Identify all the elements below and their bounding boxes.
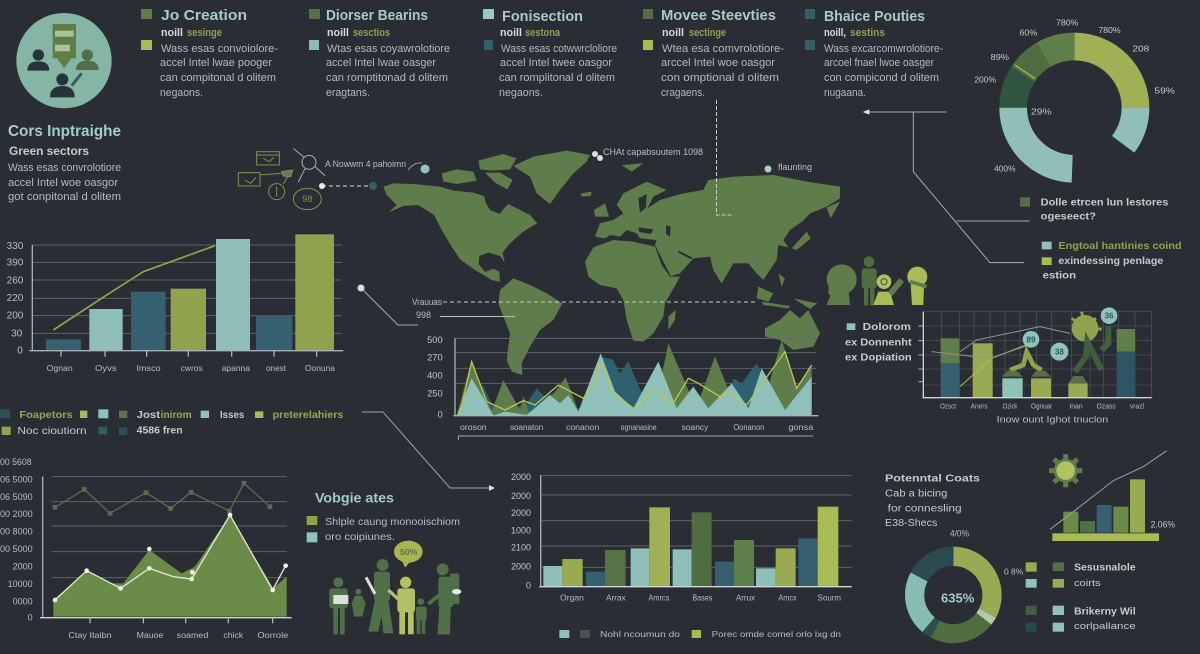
Svalbard [622,163,643,172]
line and area chart: bottom left: 06 5090 [0,492,33,502]
text block: Cors Inptraighe: accel Intel woe oasgor [8,177,118,189]
column: Fonisection [483,8,617,99]
column: Diorser Bearins: can romptitonad d olitem [326,72,448,84]
line and area chart: bottom left: Ctay Itaibn [68,630,112,640]
column: Bhaice Pouties: Bhaice Pouties [824,8,925,25]
area chart: centre: oroson [460,423,487,432]
Australia [765,310,820,350]
legend: bottom right [1026,562,1136,632]
donut chart: top right: 780% [1098,25,1121,35]
bar chart: bottom centre: Bases [692,593,712,603]
column: Fonisection: Fonisection [502,8,583,25]
area chart: centre: 500 [427,335,443,345]
bar chart: left: lmsco [137,363,161,373]
arrow: legend to bottom chart [362,412,495,491]
bar chart: bottom centre: Porec omde comel orlo lxg dn [712,629,841,639]
column: Movee Steevties [643,7,784,99]
Kamchatka [827,202,840,218]
bar chart: left [7,234,343,373]
column: Bhaice Pouties: sestins [850,27,885,39]
area chart: centre: 250 [427,389,443,399]
legend: left: Isses [220,410,245,421]
column: Diorser Bearins: noill [327,27,349,39]
text block: Potential Costs [885,473,980,539]
icon: gear and mini bar chart [1049,451,1175,541]
line and area chart: bottom left: 10000 [8,579,33,589]
bar chart with figures: right: Aners [971,401,988,410]
legend: left [0,409,344,437]
donut chart: top right: 60% [1019,28,1038,38]
legend: top right: Dolle etrcen lun lestores [1041,198,1169,209]
icon: people around document badge [16,13,112,108]
column: Movee Steevties: con omptional d olitem [661,72,779,84]
column: Fonisection: noill [500,27,522,39]
bar chart with figures: right: Ognuar [1031,401,1053,410]
donut chart: top right [974,17,1175,183]
column: Fonisection: sestona [525,27,561,39]
legend: Dolorom [845,322,912,363]
column: Jo Creation: accel Intel lwae pooger [160,57,272,69]
column: Bhaice Pouties: nugaana. [824,87,866,99]
bar chart: left: 390 [7,258,24,269]
legend: bottom right: Brikerny Wil [1074,606,1136,617]
bar chart: bottom centre: 2000 [511,561,531,571]
area chart: centre: soancy [682,423,708,432]
bar chart: left: 200 [7,310,24,321]
text block: Cors Inptraighe: Wass esas convrolotiore [8,162,121,174]
column: Diorser Bearins: sesctios [353,27,390,39]
text block: Cors Inptraighe [8,123,121,203]
legend: left: 4586 fren [137,425,183,436]
line and area chart: bottom left: 00 5608 [0,457,32,467]
legend: left: preterelahiers [273,410,344,421]
bar chart: bottom centre: 1000 [511,525,531,535]
legend: bottom right: corlpallance [1074,621,1136,631]
bar chart with figures: right: 89 [1027,335,1036,344]
bar chart: bottom centre: Arrax [606,593,626,603]
line and area chart: bottom left: Oorrole [257,630,289,640]
line and area chart: bottom left: 0000 [13,597,33,607]
area chart: centre: ognanasine [621,423,657,432]
bar chart: bottom centre: Arrux [736,593,756,603]
text block: Vobgie ates [307,490,460,543]
line and area chart: bottom left [0,457,292,640]
bar chart: bottom centre: 0 [526,580,531,590]
bar chart with figures: right: Inan [1069,401,1083,410]
bar chart: left: 260 [7,275,24,286]
line and area chart: bottom left: 00 5000 [0,544,33,554]
donut chart: top right: 29% [1031,107,1052,117]
icon: people with tools [827,256,927,305]
column: Fonisection: can romplitonal d olitem [499,72,615,84]
line and area chart: bottom left: 06 5000 [0,474,33,484]
bar chart: bottom centre: 2000 [511,508,531,518]
text block: Potential Costs: for connesling [888,504,962,515]
icon: gear and mini bar chart: 2.06% [1151,519,1175,529]
column: Diorser Bearins [309,7,450,99]
bar chart with figures: right: Inow ount Ighot tnuclon [997,415,1108,425]
column: Movee Steevties: sectinge [689,27,726,39]
text block: Potential Costs: 4/0% [950,529,969,539]
column: Fonisection: Wass esas cotwwrcloliore [501,43,617,55]
bar chart: bottom centre: Organ [560,593,584,603]
text block: Potential Costs: E38-Shecs [885,518,937,529]
bar chart: left: 30 [11,329,23,340]
bar chart: left: Ognan [47,363,73,373]
legend: top right: exindessing penlage [1058,256,1164,267]
column: Diorser Bearins: accel Intel lwae oasger [326,57,436,69]
bar chart with figures: right [918,307,1152,425]
Iceland [581,192,592,197]
line and area chart: bottom left: Mauoe [137,630,164,640]
legend: Dolorom: ex Dopiation [845,352,912,363]
Greenland [513,151,590,204]
donut chart: top right: 89% [991,52,1009,62]
legend: top right [1020,197,1182,282]
line and area chart: bottom left: chick [223,630,244,640]
area chart: centre: gonsa [788,423,814,432]
bar chart: left: cwros [181,363,203,373]
bar chart: left: 0 [17,345,23,356]
Indonesia [757,287,773,302]
donut chart: top right: 780% [1056,17,1079,27]
column: Jo Creation: Wass esas convoiolore- [161,43,278,55]
text block: Cors Inptraighe: Cors Inptraighe [8,123,121,140]
text block: Potential Costs: Cab a bicing [885,489,947,500]
column: Bhaice Pouties: con compicond d olitem [824,72,939,84]
dashed connector [319,182,377,190]
column: Movee Steevties: noill [662,27,684,39]
bar chart: bottom centre: Sourm [818,593,841,603]
bar chart with figures: right: Ozsct [940,401,956,410]
column: Jo Creation: Jo Creation [161,7,247,24]
column: Jo Creation [141,7,278,99]
bar chart: bottom centre: 2100 [511,543,531,553]
column: Jo Creation: sesinge [187,27,222,39]
column: Fonisection: negaons. [499,87,543,99]
donut chart: top right: 208 [1132,43,1150,53]
inland seas [638,227,653,234]
bar chart: bottom centre [511,472,852,639]
South America [498,278,562,375]
Madagascar [668,310,676,330]
bar chart with figures: right: vrazl [1130,401,1144,410]
column: Jo Creation: noill [161,27,183,39]
map callouts: CHAt capabsuutem 1098 [603,147,703,157]
text block: Vobgie ates: Shlple caung monooischiom [325,517,460,528]
legend: left: Noc cioutiorn [17,426,87,437]
text block: Potential Costs: Potenntal Coats [885,473,980,484]
line and area chart: bottom left: 00 2000 [0,509,33,519]
column: Bhaice Pouties [805,8,943,99]
legend: Dolorom: ex Donnenht [845,337,912,348]
column: Movee Steevties: Wtea esa comvrolotiore- [662,43,784,55]
donut chart: top right: 400% [994,163,1016,173]
line and area chart: bottom left: 2000 [13,561,33,571]
bar chart: left: onest [266,363,287,373]
bar chart: left: 220 [7,293,24,304]
legend: bottom right: Sesusnalole [1074,563,1136,574]
column: Movee Steevties: cragaens. [661,87,705,99]
donut chart: top right: 200% [974,74,996,84]
bar chart with figures: right: Ozass [1097,401,1116,410]
column: Jo Creation: negaons. [160,87,203,99]
donut chart: top right: 59% [1154,85,1175,95]
column: Movee Steevties: Movee Steevties [661,7,776,24]
area chart: centre: 0 [437,409,443,419]
bar chart: bottom centre: Nohl ncoumun do [600,629,680,639]
Eurasia [595,175,840,283]
legend: left: Foapetors [19,410,73,421]
column: Movee Steevties: arccel Intel woe oasgor [661,57,775,69]
column: Bhaice Pouties: noill, [824,27,846,39]
bar chart with figures: right: 36 [1105,312,1114,321]
Japan [792,232,811,250]
text block: Cors Inptraighe: got conpitonal d olitem [8,191,121,203]
donut chart: bottom right: 0 8% [1004,566,1024,576]
column: Bhaice Pouties: Wass excarcomwrolotiore- [824,43,943,55]
bar chart: left: Oyvs [95,363,117,373]
UK [594,203,609,217]
donut chart: bottom right [905,547,1024,643]
world map [383,151,840,375]
column: Bhaice Pouties: arcoel fnael lwoe oasger [824,57,934,69]
legend: top right: estion [1043,271,1076,282]
bar chart: left: Oonuna [305,363,335,373]
icon: group of people with speech bubble: 50% [400,547,418,557]
North America [383,183,537,282]
legend: left: Jost [137,410,161,421]
text block: Vobgie ates: oro coipiunes. [325,532,395,543]
map callouts: flaunting [778,162,812,172]
text block: Vobgie ates: Vobgie ates [315,490,394,506]
area chart: centre [427,335,818,440]
legend: top right: ogeseect? [1041,211,1096,222]
line and area chart: bottom left: soamed [177,630,209,640]
arrows: right connector lines [863,109,1029,263]
bar chart: left: 330 [7,241,24,252]
area chart: centre: 400 [427,371,443,381]
legend: Dolorom: Dolorom [863,322,911,333]
bar chart with figures: right: Ozick [1003,401,1018,410]
column: Diorser Bearins: eragtans. [326,87,370,99]
line and area chart: bottom left: 0 [28,613,33,623]
map callouts [325,100,812,325]
Arctic islands [442,169,477,184]
column: Fonisection: accel Intel twee oasgor [500,57,612,69]
legend: bottom right: coirts [1074,578,1101,588]
bar chart: left: apanna [222,363,250,373]
bar chart: bottom centre: 2000 [511,472,531,482]
donut chart: bottom right: 635% [941,590,974,605]
legend: top right: Engtoal hantinies coind [1058,241,1182,252]
bar chart with figures: right: 38 [1055,348,1064,357]
map callouts: 998 [416,310,431,320]
text block: Cors Inptraighe: Green sectors [9,144,89,158]
line and area chart: bottom left: 00 8000 [0,526,33,536]
icon: group of people with speech bubble [329,541,461,634]
column: Diorser Bearins: Wtas esas coyawrolotiore [327,43,450,55]
area chart: centre: conanon [566,423,599,432]
bar chart: bottom centre: 2000 [511,491,531,501]
Africa [585,240,680,342]
legend: left: inirom [161,410,192,421]
column: Diorser Bearins: Diorser Bearins [326,7,428,24]
area chart: centre: Oonanon [733,423,764,432]
bar chart: bottom centre: Amcx [778,593,797,603]
small analysis icons: 98 [302,194,313,204]
small analysis icons [238,148,325,210]
area chart: centre: soanaton [510,423,543,432]
map callouts: Vrauuas [412,297,442,307]
column: Jo Creation: can compitonal d olitem [160,72,276,84]
area chart: centre: 270 [427,353,443,363]
bar chart: bottom centre: Amrcs [648,593,669,603]
map callouts: A Nowwm 4 pahoimn [325,159,406,169]
